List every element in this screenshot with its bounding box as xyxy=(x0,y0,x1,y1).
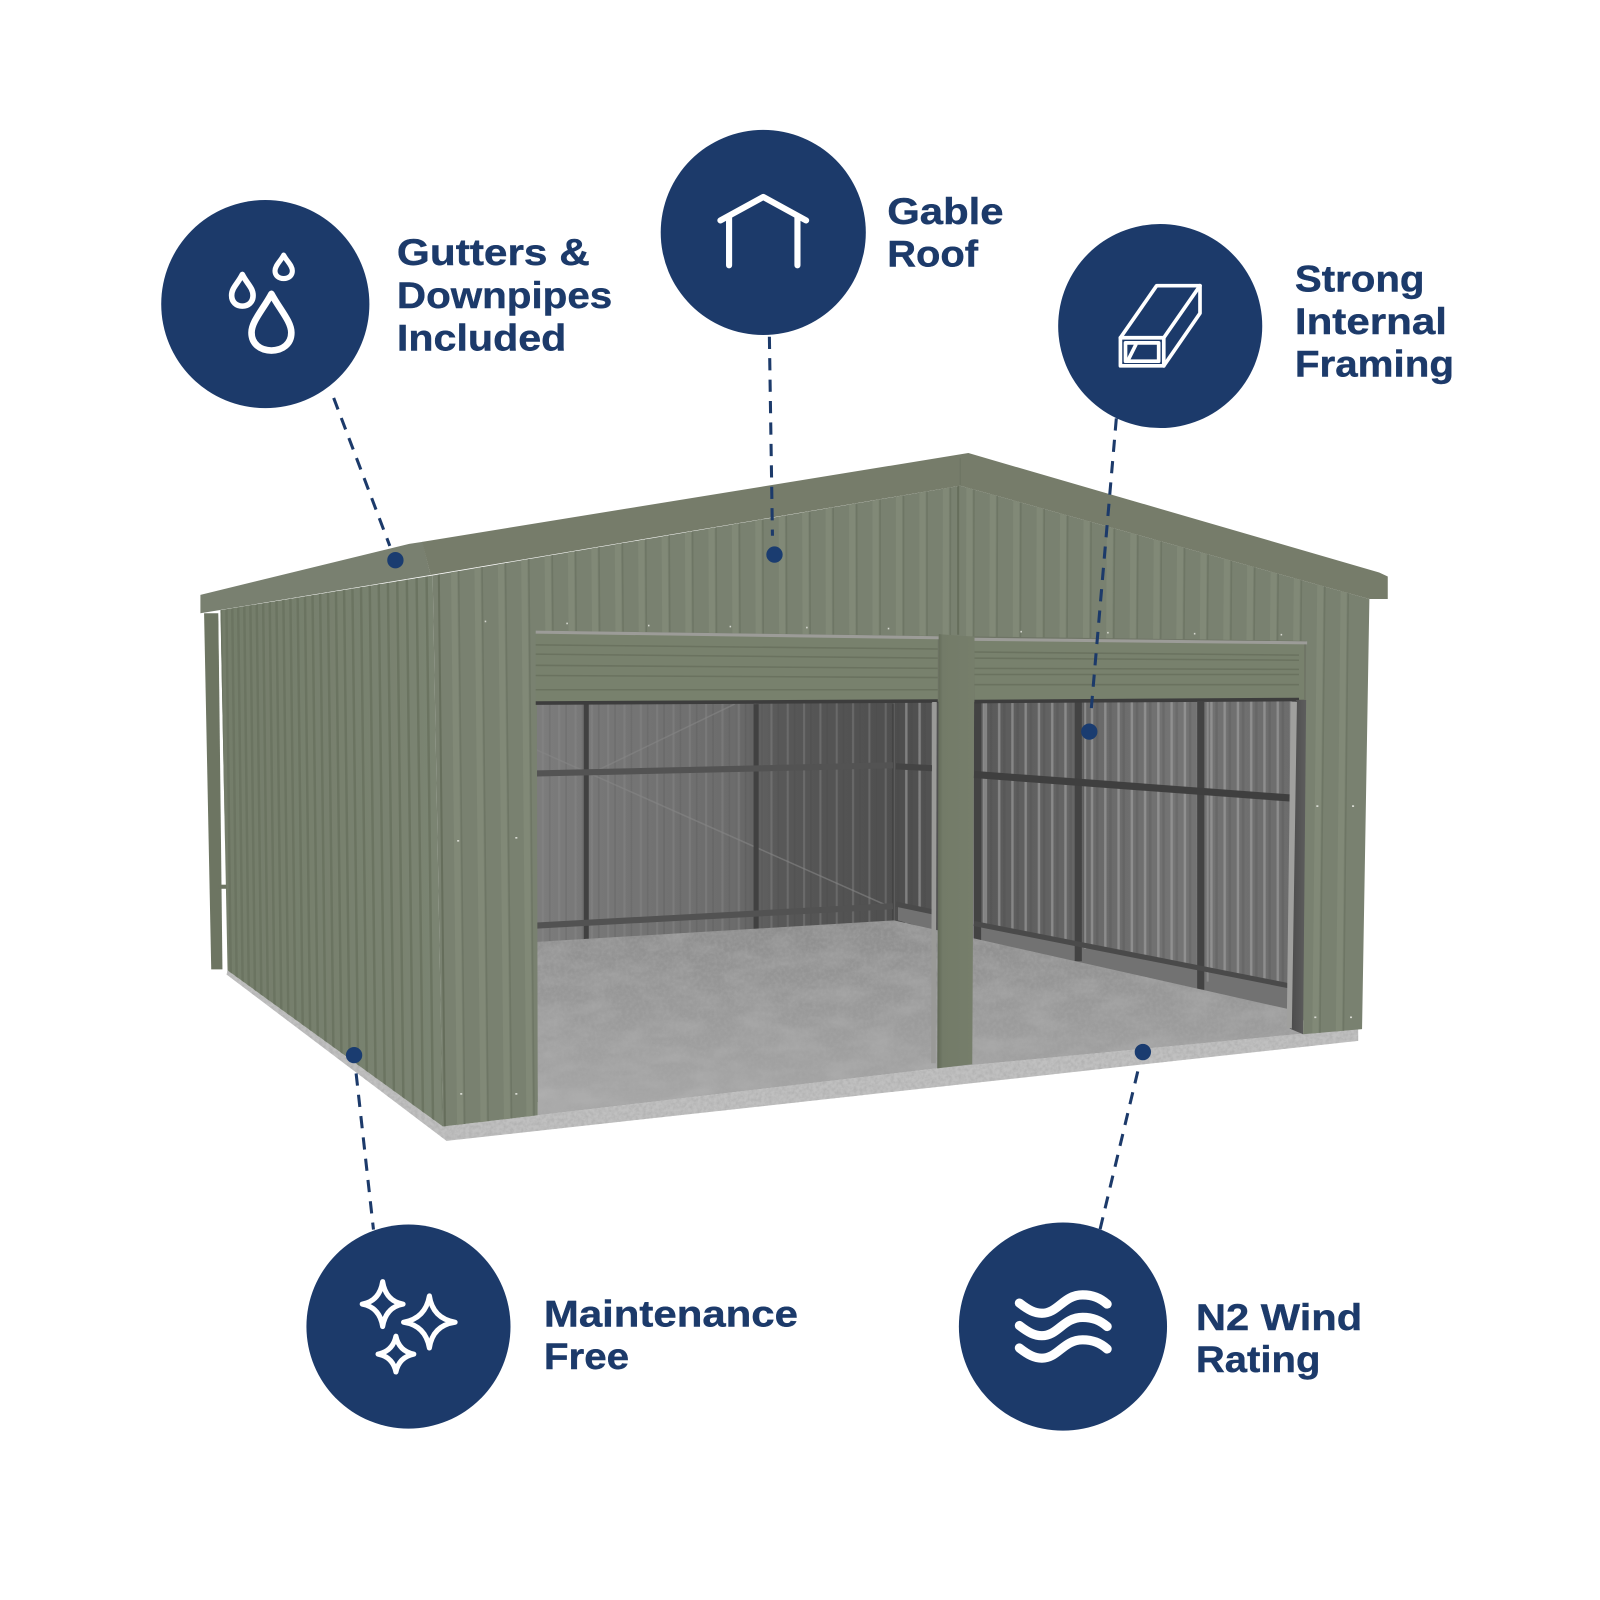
label: framing xyxy=(1295,259,1454,385)
leader line and marker: gable xyxy=(766,337,783,563)
icon circle: gutters xyxy=(161,200,369,408)
callout: wind rating xyxy=(959,1044,1362,1431)
leader line and marker: maintenance xyxy=(346,1047,373,1230)
roller door header right xyxy=(974,639,1307,702)
label: wind: Rating xyxy=(1196,1339,1320,1380)
centre post xyxy=(937,634,974,1068)
icon: wind waves xyxy=(1019,1295,1107,1358)
callout: internal framing xyxy=(1058,224,1454,740)
callout: gable roof xyxy=(661,130,1004,563)
illustration: garage building xyxy=(200,453,1388,1141)
concrete floor xyxy=(537,920,1303,1115)
label: framing: Internal xyxy=(1295,301,1447,342)
label: framing: Framing xyxy=(1295,344,1454,385)
leader line and marker: framing xyxy=(1081,418,1116,740)
icon: water drops xyxy=(232,255,292,351)
icon: house gable xyxy=(720,197,806,265)
callout: gutters and downpipes xyxy=(161,200,612,568)
label: framing: Strong xyxy=(1295,259,1424,300)
roller door header left xyxy=(536,632,939,703)
label: gable: Gable xyxy=(887,191,1004,232)
label: gutters: Gutters & xyxy=(397,232,590,273)
label: maintenance: Maintenance xyxy=(544,1294,798,1335)
label: gutters xyxy=(397,232,612,359)
side wall corrugated xyxy=(220,571,443,1133)
leader line and marker: wind xyxy=(1100,1044,1151,1230)
label: maintenance: Free xyxy=(544,1336,629,1377)
label: wind: N2 Wind xyxy=(1196,1297,1362,1338)
downpipe xyxy=(204,613,227,969)
screws xyxy=(457,621,1354,1094)
icon circle: maintenance xyxy=(306,1224,511,1429)
door tracks xyxy=(931,700,1306,1063)
label: gutters: Downpipes xyxy=(397,275,612,316)
leader line and marker: gutters xyxy=(334,398,404,568)
icon: sparkles xyxy=(362,1282,455,1372)
label: gutters: Included xyxy=(397,318,566,359)
opening backing xyxy=(531,624,1316,1102)
callout: maintenance free xyxy=(306,1047,798,1429)
icon circle: framing xyxy=(1058,224,1262,428)
label: gable: Roof xyxy=(887,233,979,274)
fascia and roof edge xyxy=(200,453,1388,613)
label: wind xyxy=(1196,1297,1362,1380)
label: gable xyxy=(887,191,1004,274)
concrete slab xyxy=(227,970,1358,1141)
front wall cladding xyxy=(433,480,1369,1133)
interior side wall xyxy=(894,699,1298,1029)
icon circle: wind xyxy=(959,1222,1167,1431)
label: maintenance xyxy=(544,1294,798,1377)
icon circle: gable xyxy=(661,130,866,335)
interior back wall xyxy=(537,702,895,944)
icon: box section xyxy=(1120,286,1200,366)
